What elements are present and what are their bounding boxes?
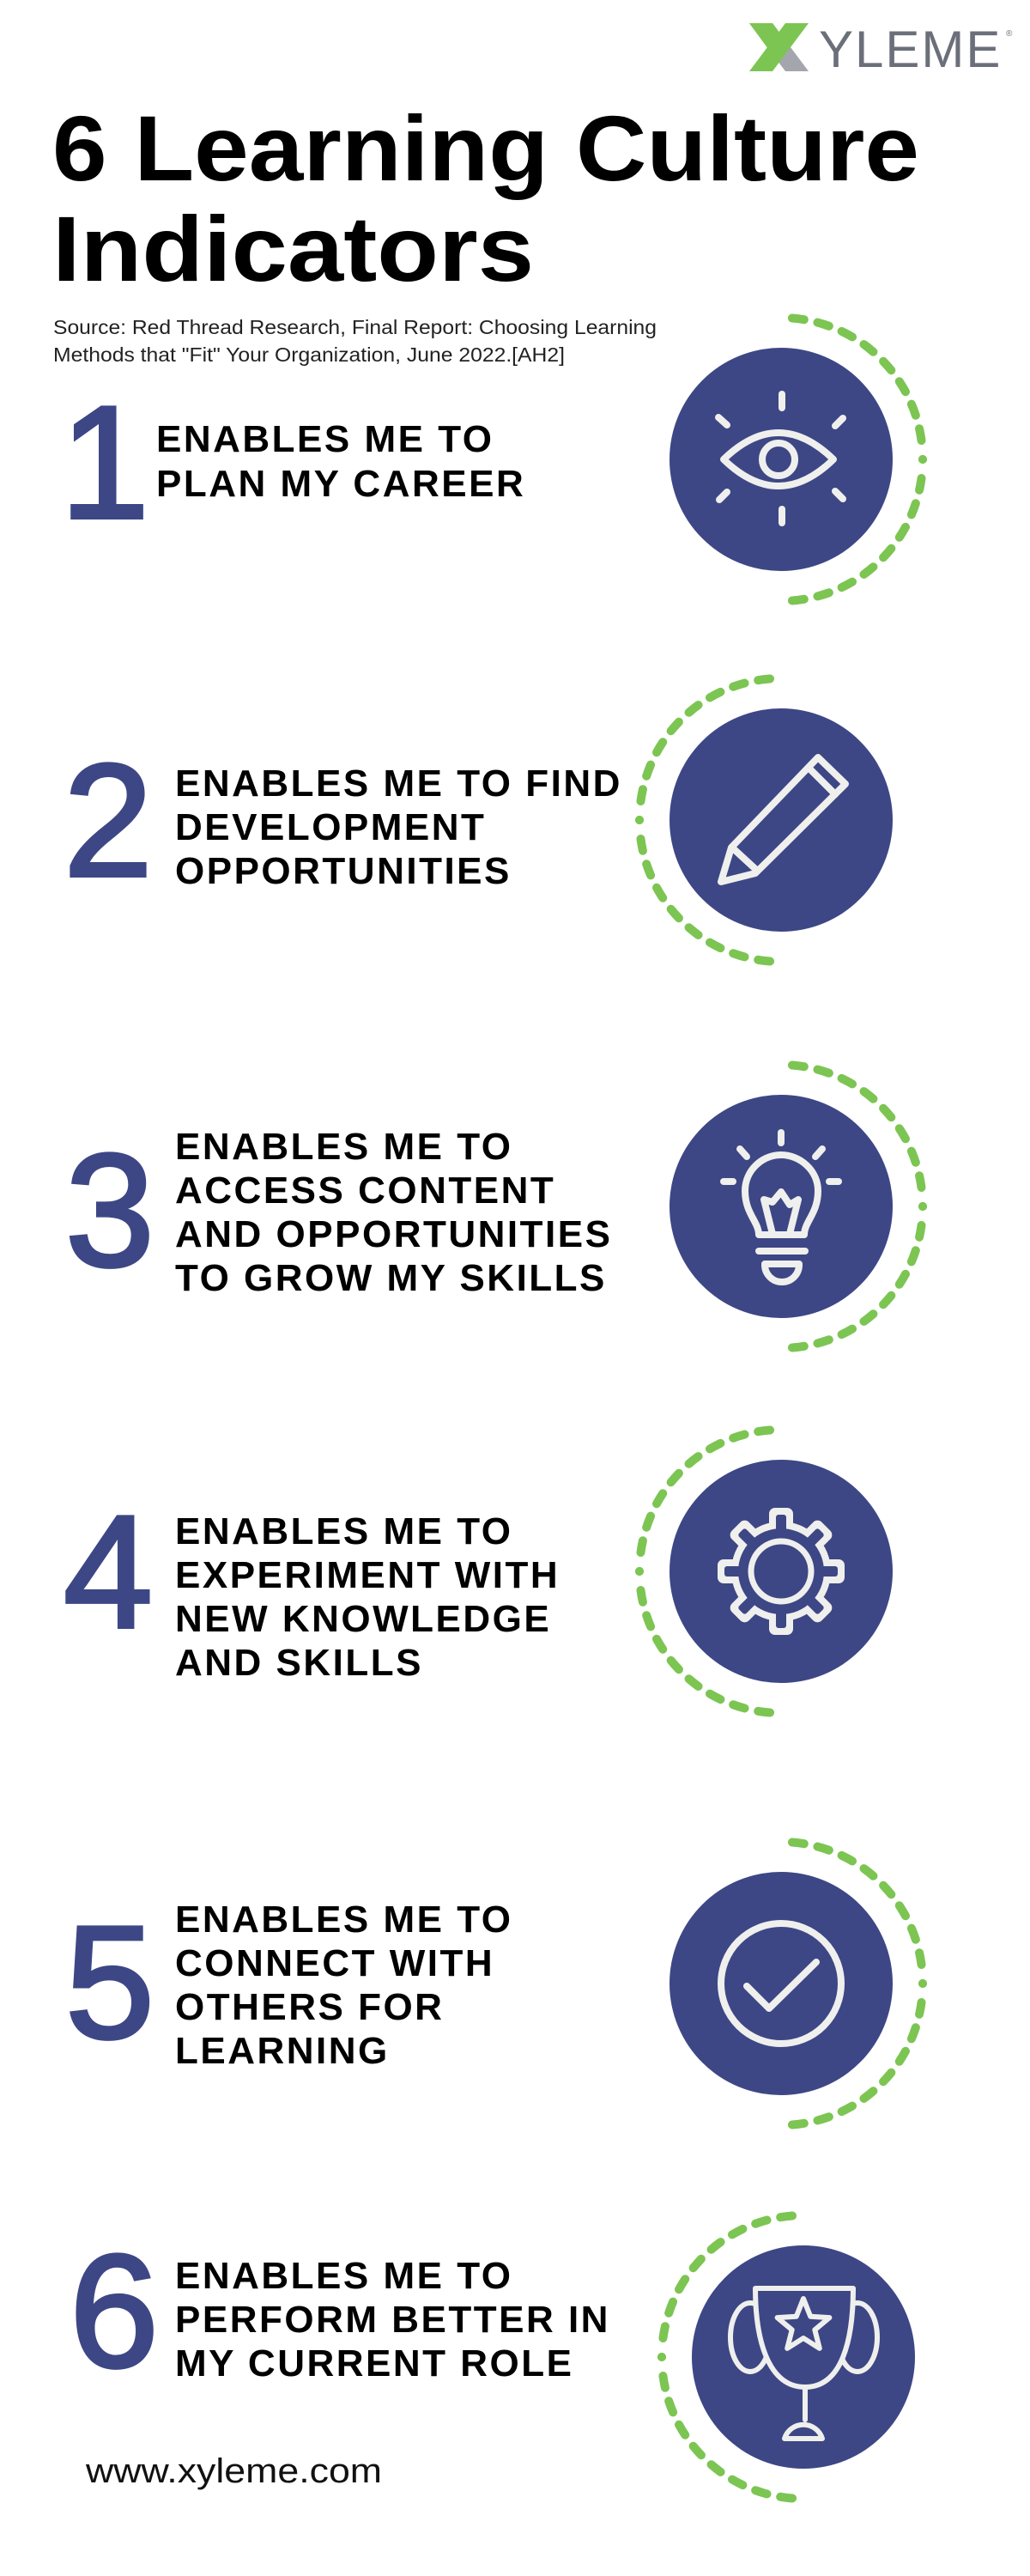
text 1: ENABLES ME TO xyxy=(156,418,494,460)
icon: trophy xyxy=(662,2215,915,2499)
text 6: PERFORM BETTER IN xyxy=(175,2299,610,2341)
source text: Methods that "Fit" Your Organization, June 2022.[AH2] xyxy=(53,343,565,366)
item 4 xyxy=(64,1430,893,1713)
website url: www.xyleme.com xyxy=(85,2452,382,2490)
icon: pencil xyxy=(639,678,893,962)
text 5: ENABLES ME TO xyxy=(175,1899,513,1941)
icon: check xyxy=(670,1842,923,2125)
logo: Xyleme xyxy=(749,21,1013,78)
icon: gear xyxy=(639,1430,893,1713)
text 1: PLAN MY CAREER xyxy=(156,463,525,505)
text 4: EXPERIMENT WITH xyxy=(175,1554,560,1596)
number 3: 3 xyxy=(65,1121,154,1300)
text 4: ENABLES ME TO xyxy=(175,1510,513,1552)
item 6 xyxy=(70,2215,915,2499)
number 4: 4 xyxy=(64,1482,153,1662)
text 3: AND OPPORTUNITIES xyxy=(175,1213,612,1255)
number 6: 6 xyxy=(70,2221,159,2401)
source text: Source: Red Thread Research, Final Report: Choosing Learning xyxy=(53,316,657,338)
logo: Xyleme: YLEME xyxy=(819,21,1002,78)
title xyxy=(52,96,919,301)
number 2: 2 xyxy=(64,731,153,910)
source text xyxy=(53,316,657,366)
item 2 xyxy=(64,678,893,962)
icon: eye xyxy=(670,318,923,601)
number 5: 5 xyxy=(65,1893,154,2072)
item 1 xyxy=(60,318,923,601)
text 4: NEW KNOWLEDGE xyxy=(175,1598,551,1640)
text 5: OTHERS FOR xyxy=(175,1986,444,2028)
text 5: CONNECT WITH xyxy=(175,1942,494,1984)
text 5: LEARNING xyxy=(175,2030,390,2072)
logo: Xyleme: ® xyxy=(1006,29,1013,39)
text 2: DEVELOPMENT xyxy=(175,806,486,848)
number 1: 1 xyxy=(60,373,149,552)
text 2: ENABLES ME TO FIND xyxy=(175,762,622,805)
text 6: ENABLES ME TO xyxy=(175,2255,513,2297)
text 3: TO GROW MY SKILLS xyxy=(175,1257,607,1299)
text 3: ENABLES ME TO xyxy=(175,1126,513,1168)
item 3 xyxy=(65,1065,923,1348)
text 4: AND SKILLS xyxy=(175,1642,423,1684)
item 5 xyxy=(65,1842,923,2125)
text 2: OPPORTUNITIES xyxy=(175,850,512,892)
text 6: MY CURRENT ROLE xyxy=(175,2342,573,2385)
icon: light bulb xyxy=(670,1065,923,1348)
title: Indicators xyxy=(52,197,534,301)
text 3: ACCESS CONTENT xyxy=(175,1170,555,1212)
title: 6 Learning Culture xyxy=(52,96,919,200)
